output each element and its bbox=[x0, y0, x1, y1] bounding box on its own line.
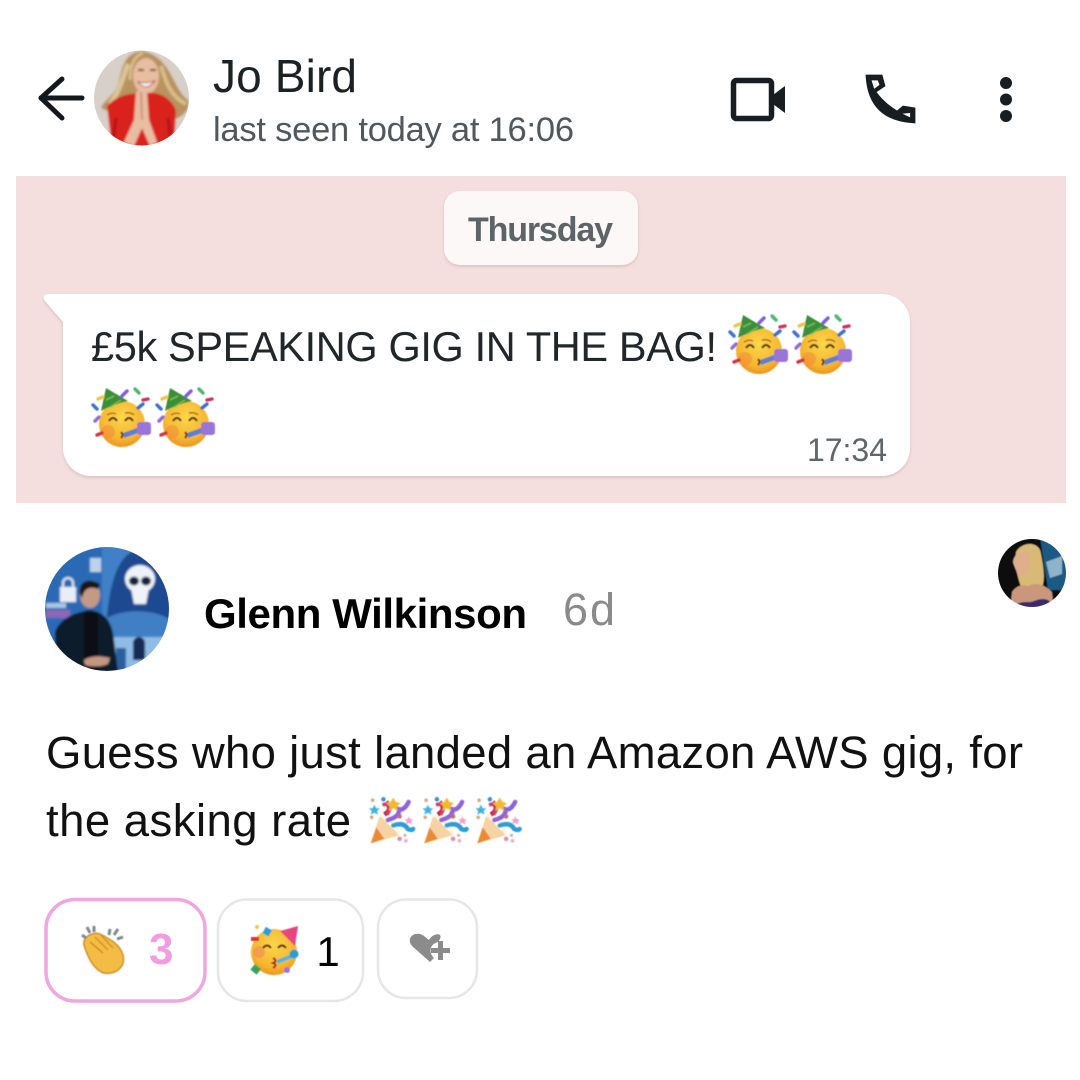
timestamp: 6d: 6d bbox=[563, 584, 615, 635]
reaction: clap 3 bbox=[46, 900, 205, 1001]
avatar: Jo Bird bbox=[94, 50, 189, 146]
name: Glenn Wilkinson: Glenn Wilkinson bbox=[204, 590, 527, 637]
panel: pink chat area bbox=[16, 176, 1066, 503]
post text bbox=[46, 727, 1023, 846]
post text: the asking rate bbox=[46, 795, 351, 846]
icon: heart plus bbox=[410, 934, 450, 962]
reaction: add bbox=[378, 900, 477, 998]
date pill: Thursday bbox=[444, 191, 638, 265]
reaction: party 1 bbox=[218, 900, 363, 1001]
post text: Guess who just landed an Amazon AWS gig, for bbox=[46, 727, 1023, 778]
icon: more menu bbox=[1000, 77, 1012, 122]
count: 1: 1 bbox=[316, 928, 340, 975]
count: 3: 3 bbox=[149, 925, 173, 974]
icon: clapping hands bbox=[82, 926, 123, 973]
message bubble bbox=[44, 294, 910, 476]
message time: 17:34 bbox=[807, 432, 887, 468]
date pill: Thursday: Thursday bbox=[468, 211, 613, 249]
status: last seen: last seen today at 16:06 bbox=[213, 111, 574, 149]
avatar: Glenn Wilkinson bbox=[45, 547, 169, 671]
name: Jo Bird: Jo Bird bbox=[213, 50, 357, 102]
emoji: party poppers bbox=[369, 797, 520, 843]
icon: back arrow bbox=[41, 79, 82, 118]
avatar: viewer bbox=[998, 539, 1066, 607]
icon: party face bbox=[250, 925, 298, 975]
emoji: party faces bbox=[93, 315, 852, 447]
icon: video call bbox=[734, 80, 785, 118]
icon: phone bbox=[866, 75, 915, 123]
message text: £5k SPEAKING GIG IN THE BAG! bbox=[91, 323, 717, 370]
post: Glenn Wilkinson bbox=[42, 537, 1068, 1001]
chat header bbox=[41, 48, 1012, 150]
